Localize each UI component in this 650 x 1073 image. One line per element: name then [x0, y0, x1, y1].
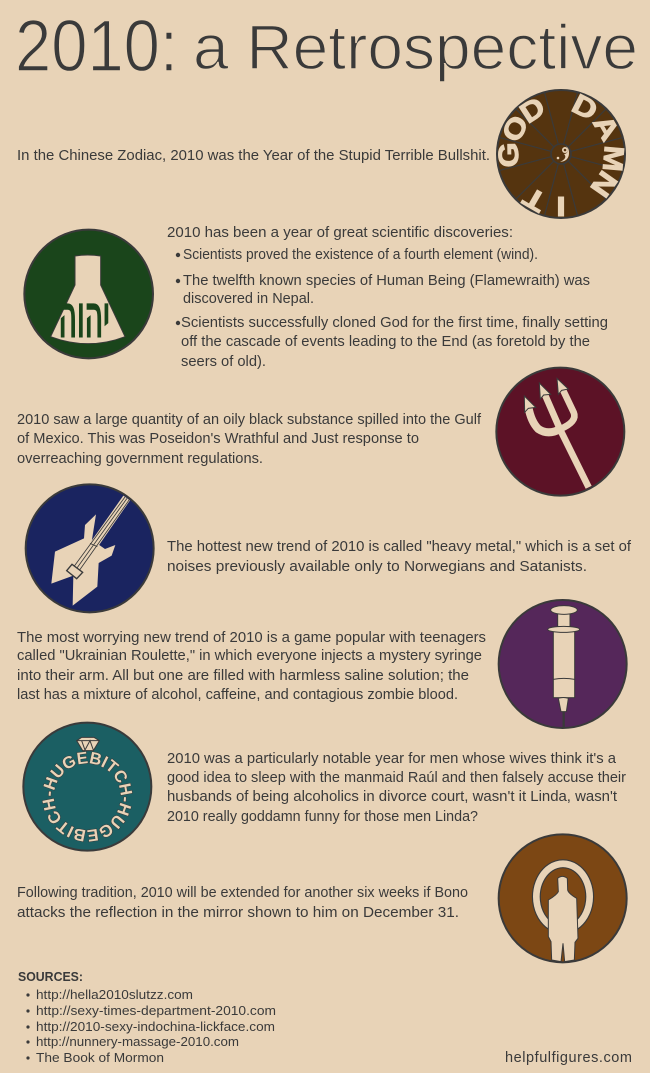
sources list: The Book of Mormon	[36, 1051, 164, 1065]
icon: god damn it wheel: M	[596, 144, 630, 173]
icon: hugebitch ring: -HUGEBITCH-HUGEBITCH	[42, 751, 133, 842]
text: heavy metal: noises previously available only to Norwegians and Satanists.	[167, 558, 587, 575]
text: gulf oil spill: of Mexico. This was Poseidon's Wrathful and Just response to	[17, 430, 419, 447]
title: a Retrospective	[193, 13, 638, 83]
text: heavy metal	[167, 538, 632, 575]
icon: figure in mirror	[499, 834, 627, 962]
text: bono	[17, 884, 468, 921]
text: heavy metal: The hottest new trend of 2010 is called "heavy metal," which is a set of	[167, 538, 632, 555]
text: linda: 2010 really goddamn funny for those men Linda?	[167, 808, 478, 825]
sources list: SOURCES:	[18, 970, 83, 984]
icon: god damn it wheel: O	[496, 111, 535, 147]
text: gulf oil spill	[17, 411, 482, 467]
text: chinese zodiac: In the Chinese Zodiac, 2010 was the Year of the Stupid Terrible Bullshit.	[17, 147, 490, 164]
icon: god damn it wheel: N	[584, 165, 624, 203]
title	[15, 6, 638, 87]
text: gulf oil spill: overreaching government regulations.	[17, 450, 263, 467]
sources list: http://2010-sexy-indochina-lickface.com	[36, 1020, 275, 1034]
text: ukrainian roulette: into their arm. All but one are filled with harmless saline solution; the	[17, 667, 469, 684]
sources list: http://hella2010slutzz.com	[36, 988, 193, 1002]
icon: trident	[496, 368, 624, 496]
text: linda	[167, 750, 626, 825]
sources list	[18, 970, 276, 1065]
icon: god damn it wheel: G	[494, 142, 525, 168]
sources list: http://nunnery-massage-2010.com	[36, 1035, 239, 1049]
text: linda: good idea to sleep with the manmaid Raúl and then falsely accuse their	[167, 769, 626, 786]
text: scientific discoveries	[167, 224, 608, 370]
icon: god damn it wheel: D	[567, 88, 603, 127]
text: scientific discoveries: off the cascade of events leading to the End (as foretold by the	[181, 333, 590, 350]
text: ukrainian roulette	[17, 629, 486, 703]
text: bono: attacks the reflection in the mirror shown to him on December 31.	[17, 904, 459, 921]
text: scientific discoveries: discovered in Nepal.	[183, 290, 314, 307]
credit: helpfulfigures.com	[505, 1050, 632, 1066]
sources list: http://sexy-times-department-2010.com	[36, 1004, 276, 1018]
text: scientific discoveries: The twelfth known species of Human Being (Flamewraith) was	[183, 272, 590, 289]
text: ukrainian roulette: called "Ukrainian Roulette," in which everyone injects a mystery syringe	[17, 647, 482, 664]
icon: metal guitar	[26, 484, 154, 612]
text: bono: Following tradition, 2010 will be extended for another six weeks if Bono	[17, 884, 468, 901]
text: gulf oil spill: 2010 saw a large quantity of an oily black substance spilled into the Gulf	[17, 411, 482, 428]
icon: god damn it wheel	[494, 88, 630, 223]
text: linda: husbands of being alcoholics in divorce court, wasn't it Linda, wasn't	[167, 788, 618, 805]
icon: god damn it wheel: I	[556, 191, 566, 223]
text: scientific discoveries: 2010 has been a year of great scientific discoveries:	[167, 224, 513, 241]
icon: flask with hebrew letters: יהוה	[58, 282, 110, 351]
text: ukrainian roulette: last has a mixture of alcohol, caffeine, and contagious zombie blood.	[17, 686, 458, 703]
title: 2010:	[15, 6, 178, 87]
text: scientific discoveries: Scientists successfully cloned God for the first time, finally setting	[181, 314, 608, 331]
icon: god damn it wheel: A	[587, 109, 626, 146]
icon: hugebitch ring	[22, 722, 152, 852]
text: ukrainian roulette: The most worrying new trend of 2010 is a game popular with teenagers	[17, 629, 486, 646]
icon: god damn it wheel: T	[517, 180, 552, 219]
text: linda: 2010 was a particularly notable year for men whose wives think it's a	[167, 750, 617, 767]
icon: syringe	[499, 600, 627, 728]
icon: flask with hebrew letters	[24, 230, 153, 358]
text: scientific discoveries: seers of old).	[181, 353, 266, 370]
text: scientific discoveries: Scientists proved the existence of a fourth element (wind).	[183, 246, 538, 263]
icon: god damn it wheel: D	[515, 91, 551, 130]
